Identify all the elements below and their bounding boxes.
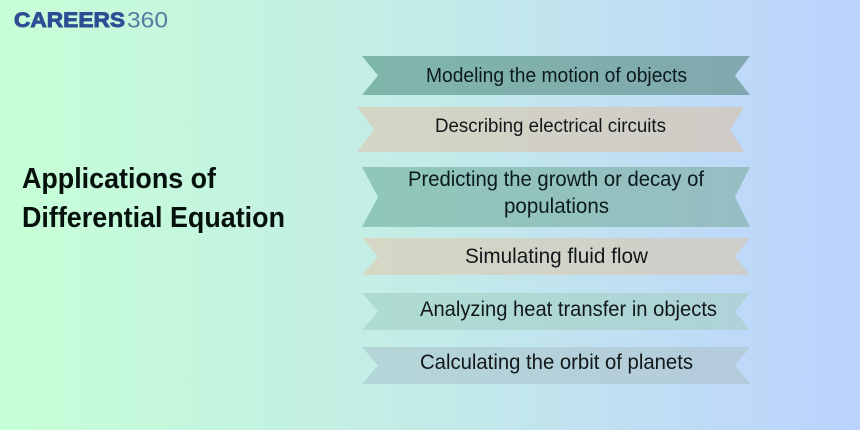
logo: Careers360 xyxy=(14,8,168,32)
banner: electrical circuits: Describing electrical circuits xyxy=(435,116,666,137)
banner: orbit of planets: Calculating the orbit of planets xyxy=(420,351,693,374)
logo: Careers360: CAREERS xyxy=(14,9,125,32)
banner: electrical circuits xyxy=(357,107,744,152)
banner: fluid flow xyxy=(362,238,750,275)
banner: growth or decay xyxy=(362,167,750,227)
banner: fluid flow: Simulating fluid flow xyxy=(465,245,649,268)
title: Applications of xyxy=(22,163,216,195)
banner: modeling motion xyxy=(362,56,750,95)
banner: heat transfer xyxy=(362,293,750,330)
title xyxy=(22,163,285,234)
banner: growth or decay: Predicting the growth or decay of xyxy=(408,168,704,191)
title: Differential Equation xyxy=(22,202,285,234)
banner: modeling motion: Modeling the motion of objects xyxy=(426,65,687,87)
banner: orbit of planets xyxy=(362,347,750,384)
banner: growth or decay: populations xyxy=(504,195,609,218)
logo: Careers360: 360 xyxy=(127,8,168,32)
banner: heat transfer: Analyzing heat transfer in objects xyxy=(420,298,717,321)
